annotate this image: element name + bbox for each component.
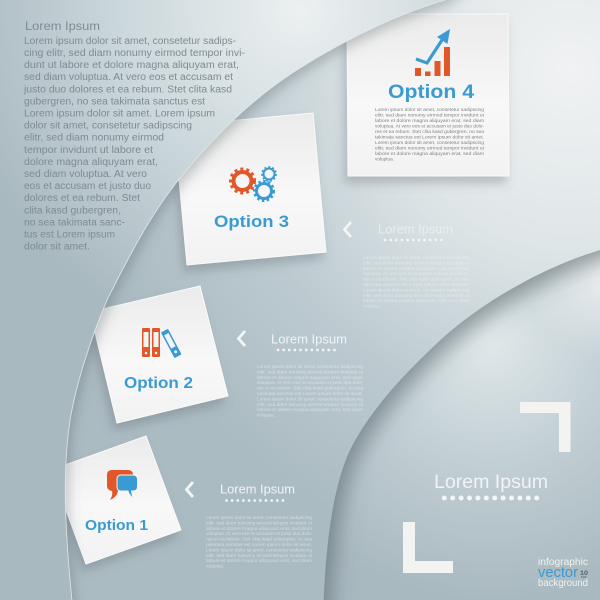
- heading: option 3: Lorem Ipsum: [378, 222, 453, 236]
- text block: left column: justo duo dolores et ea rebum. Stet clita kasd: [23, 84, 232, 95]
- text: option 2 description: voluptua.: [257, 413, 275, 418]
- text block: left column: sed diam voluptua. At vero: [24, 169, 147, 180]
- heading: central: Lorem Ipsum: [434, 472, 548, 493]
- text: option 1 description: elitr, sed diam nonumy eirmod tempor invidunt ut: [206, 520, 313, 525]
- text: option 3 description: res et ea rebum. Stet clita kasd gubergren, no sea: [363, 277, 469, 282]
- text: option 2 description: res et ea rebum. Stet clita kasd gubergren, no sea: [257, 386, 363, 391]
- text: option 3 description: labore et dolore magna aliquyam erat, sed diam: [363, 298, 469, 303]
- callout: option 3: [344, 222, 470, 309]
- text: option 3 description: elitr, sed diam nonumy eirmod tempor invidunt ut: [363, 260, 470, 265]
- text: option 1 description: voluptua. At vero eos et accusam et justo duo dolo-: [206, 531, 312, 536]
- text: option 3 description: takimata sanctus est Lorem ipsum dolor sit amet.: [363, 282, 469, 287]
- text block: left column: cing elitr, sed diam nonumy eirmod tempor invi-: [24, 48, 245, 59]
- text: option 2 description: labore et dolore magna aliquyam erat, sed diam: [257, 407, 363, 412]
- text: option 2 description: takimata sanctus est Lorem ipsum dolor sit amet.: [257, 391, 363, 396]
- text: option 2 description: elitr, sed diam nonumy eirmod tempor invidunt ut: [257, 369, 364, 374]
- text: option 2 description: Lorem ipsum dolor sit amet, consetetur sadipscing: [257, 396, 363, 401]
- logo: infographic vector background: eps: [581, 575, 587, 579]
- text block: left column: no sea takimata sanc-: [24, 217, 125, 228]
- card: option 1: [51, 436, 181, 564]
- icon: binders: [142, 328, 182, 358]
- title: option 1: Option 1: [85, 518, 148, 534]
- text: option 4 description: res et ea rebum. Stet clita kasd gubergren, no sea: [375, 129, 484, 134]
- text block: left column: elitr, sed diam nonumy eirmod: [24, 133, 164, 144]
- arrow: option 1 chevron: [186, 482, 193, 497]
- arrow: option 3 chevron: [344, 222, 351, 237]
- dots: central: [444, 496, 537, 500]
- logo: infographic vector background: infographic: [538, 557, 588, 568]
- text: option 1 description: elitr, sed diam nonumy eirmod tempor invidunt ut: [206, 553, 313, 558]
- text: option 1 description: [206, 515, 313, 569]
- dots: option 1: [226, 499, 288, 502]
- text: option 4 description: takimata sanctus est Lorem ipsum dolor sit amet.: [375, 134, 484, 140]
- logo: infographic vector background: [538, 557, 588, 589]
- logo: infographic vector background: 10: [580, 570, 588, 577]
- text: option 4 description: elitr, sed diam nonumy eirmod tempor invidunt ut: [375, 146, 485, 150]
- text block: left column: gubergren, no sea takimata sanctus est: [24, 96, 205, 107]
- card: option 3: [174, 113, 326, 265]
- panel: top-left curved layer: [0, 0, 470, 600]
- text block: left column: dolore magna aliquyam erat,: [24, 157, 158, 168]
- text: option 3 description: Lorem ipsum dolor sit amet, consetetur sadipscing: [363, 255, 469, 260]
- text block: left column: sed diam voluptua. At vero eos et accusam et: [24, 72, 233, 83]
- text: option 4 description: elitr, sed diam nonumy eirmod tempor invidunt ut: [375, 112, 485, 118]
- card: option 2: [90, 286, 228, 423]
- logo: infographic vector background: vector: [538, 564, 578, 581]
- text: option 4 description: voluptua. At vero eos et accusam et justo duo dolo-: [375, 124, 484, 128]
- text: option 1 description: labore et dolore magna aliquyam erat, sed diam: [206, 526, 312, 531]
- text: option 2 description: elitr, sed diam nonumy eirmod tempor invidunt ut: [257, 402, 364, 407]
- text: option 4 description: voluptua.: [375, 156, 394, 162]
- text: option 4 description: labore et dolore magna aliquyam erat, sed diam: [375, 151, 484, 156]
- text: option 2 description: voluptua. At vero eos et accusam et justo duo dolo-: [257, 380, 363, 385]
- bracket: top right: [520, 402, 570, 452]
- icon: gears: [230, 167, 276, 201]
- icon: rising bar chart: [415, 29, 450, 76]
- text block: left column: dolor sit amet.: [24, 242, 90, 253]
- text block: left column: dolores et ea rebum. Stet: [24, 193, 140, 204]
- text: option 4 description: [375, 107, 485, 162]
- title: option 3: Option 3: [214, 213, 289, 231]
- text: option 2 description: labore et dolore magna aliquyam erat, sed diam: [257, 375, 363, 380]
- text block: left column: eos et accusam et justo duo: [24, 181, 151, 192]
- callout: option 2: [238, 331, 364, 418]
- text: option 4 description: Lorem ipsum dolor sit amet, consetetur sadipscing: [375, 107, 484, 112]
- text block: left column: tempor invidunt ut labore et: [24, 145, 153, 156]
- heading: left column: Lorem Ipsum: [25, 19, 100, 33]
- text block: left column: clita kasd gubergren,: [24, 205, 121, 216]
- dots: option 3: [385, 239, 447, 241]
- dots: option 2: [278, 349, 340, 351]
- text block: left column: [23, 36, 245, 253]
- text block: left column: tus est Lorem ipsum: [24, 230, 115, 240]
- text: option 1 description: takimata sanctus est Lorem ipsum dolor sit amet.: [206, 542, 312, 547]
- heading: option 1: Lorem Ipsum: [220, 482, 295, 496]
- title: option 2: Option 2: [124, 375, 193, 392]
- text block: left column: dolor sit amet, consetetur sadipscing: [24, 121, 192, 132]
- text: option 3 description: elitr, sed diam nonumy eirmod tempor invidunt ut: [363, 293, 470, 298]
- text: option 3 description: voluptua. At vero eos et accusam et justo duo dolo-: [363, 271, 469, 276]
- callout: option 1: [186, 482, 313, 569]
- logo: infographic vector background: background: [538, 578, 588, 589]
- text: option 3 description: labore et dolore magna aliquyam erat, sed diam: [363, 266, 469, 271]
- callout: central heading with corner brackets: [403, 402, 570, 573]
- text: option 1 description: labore et dolore magna aliquyam erat, sed diam: [206, 558, 312, 563]
- arrow: option 2 chevron: [238, 331, 245, 346]
- bracket: bottom left: [403, 522, 453, 573]
- title: option 4: Option 4: [388, 81, 474, 103]
- text block: left column: Lorem ipsum dolor sit amet. Lorem ipsum: [24, 108, 215, 120]
- card: option 4: [347, 14, 509, 176]
- text: option 1 description: res et ea rebum. Stet clita kasd gubergren, no sea: [206, 537, 312, 542]
- text: option 2 description: Lorem ipsum dolor sit amet, consetetur sadipscing: [257, 364, 363, 369]
- text: option 1 description: Lorem ipsum dolor sit amet, consetetur sadipscing: [206, 547, 312, 552]
- text: option 1 description: voluptua.: [206, 564, 224, 569]
- text block: left column: Lorem ipsum dolor sit amet, consetetur sadips-: [24, 36, 236, 47]
- text: option 4 description: Lorem ipsum dolor sit amet, consetetur sadipscing: [375, 140, 484, 145]
- text: option 3 description: [363, 255, 470, 309]
- text: option 3 description: Lorem ipsum dolor sit amet, consetetur sadipscing: [363, 287, 469, 292]
- text: option 1 description: Lorem ipsum dolor sit amet, consetetur sadipscing: [206, 515, 312, 520]
- heading: option 2: Lorem Ipsum: [271, 332, 347, 346]
- text block: left column: dunt ut labore et dolore magna aliquyam erat,: [24, 60, 239, 71]
- text: option 2 description: [257, 364, 364, 418]
- icon: speech bubbles: [107, 470, 138, 500]
- text: option 3 description: voluptua.: [363, 304, 381, 309]
- text: option 4 description: labore et dolore magna aliquyam erat, sed diam: [375, 118, 484, 123]
